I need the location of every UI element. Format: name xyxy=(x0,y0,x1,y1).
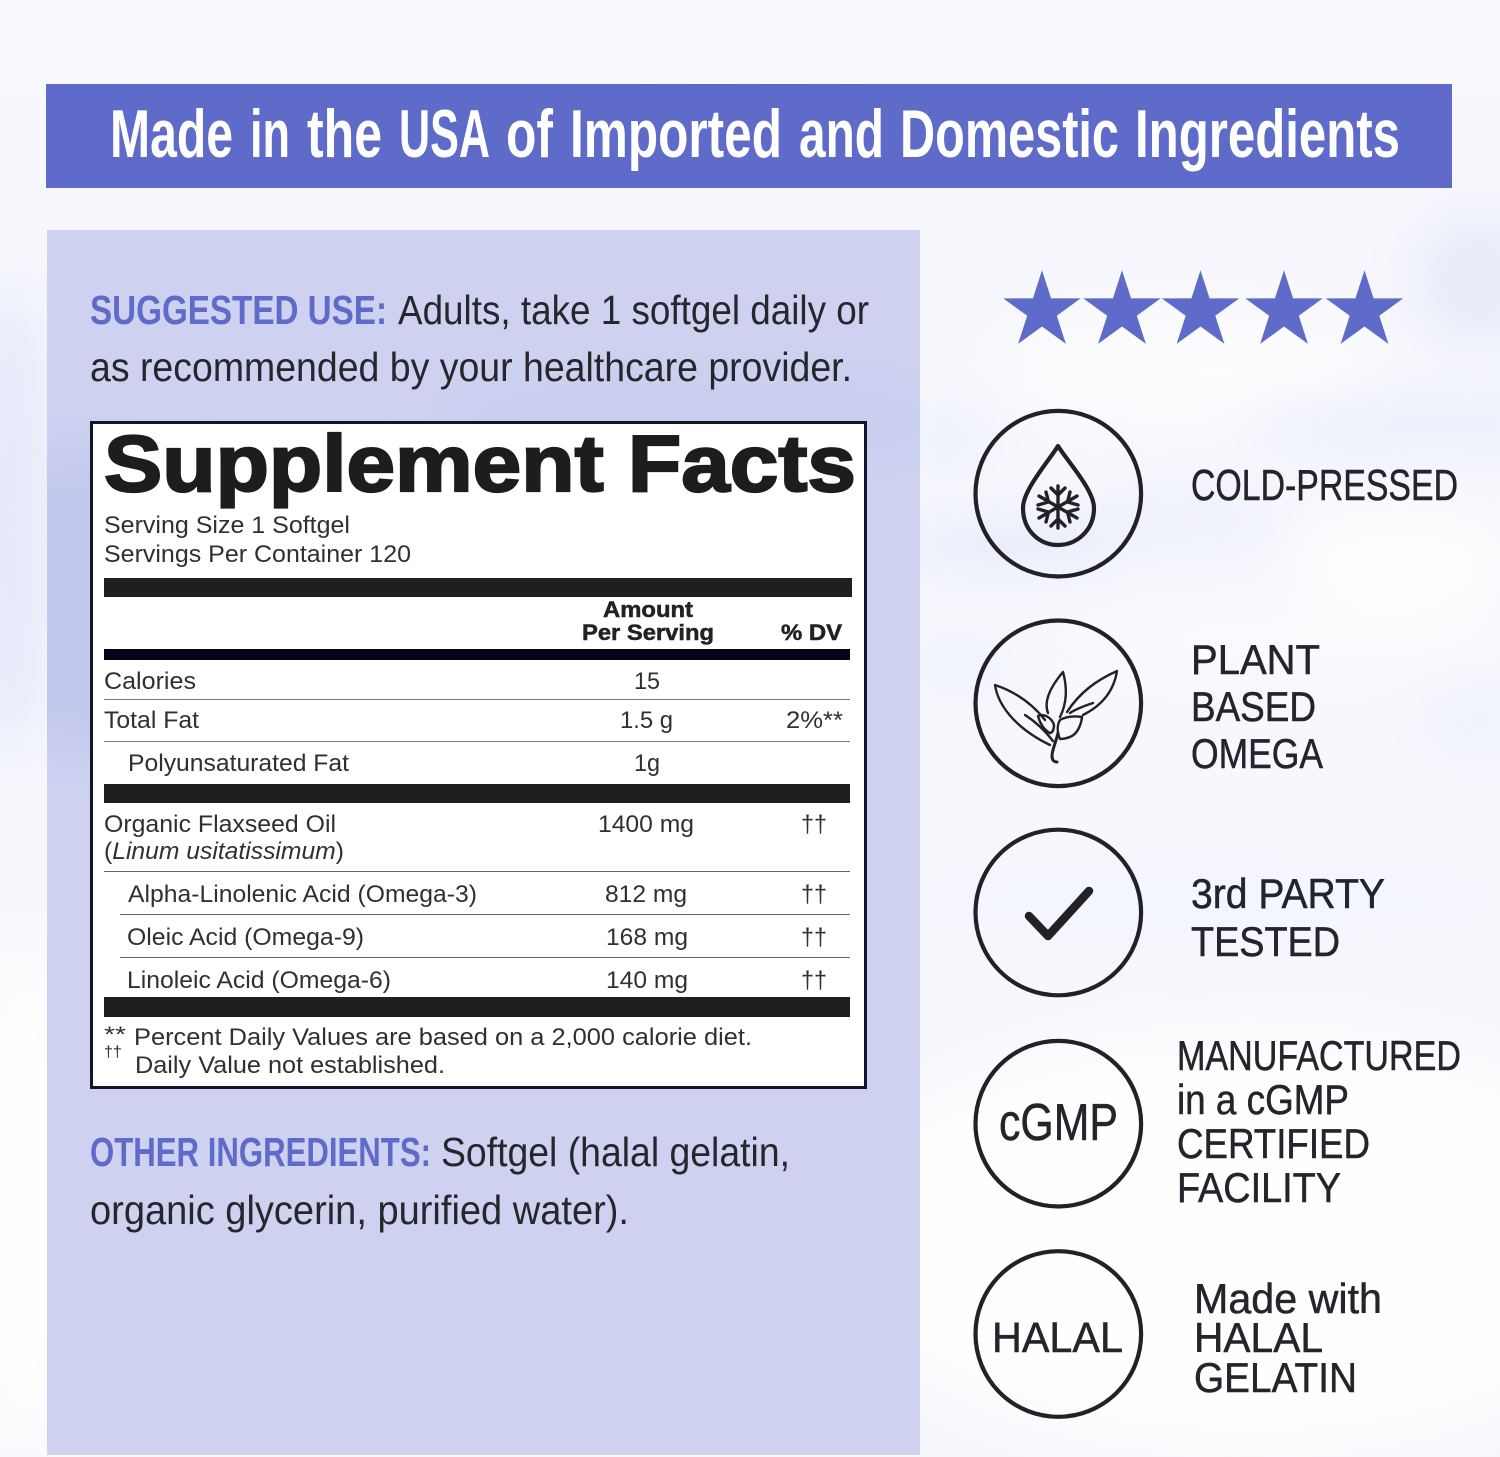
text block: suggested use: SUGGESTED USE: xyxy=(90,287,387,333)
label xyxy=(1194,1275,1382,1401)
title banner: USA xyxy=(399,96,490,172)
footnotes: Daily Value not established. xyxy=(135,1052,445,1079)
text block: other ingredients xyxy=(90,1129,790,1233)
footnotes: †† xyxy=(104,1044,122,1061)
badge: cold-pressed xyxy=(976,411,1458,576)
heading: supplement facts: Supplement Facts xyxy=(104,419,856,508)
table rows: (Linum usitatissimum) xyxy=(104,838,344,865)
label xyxy=(1191,636,1323,777)
panel: product information xyxy=(0,230,960,1455)
text block: other ingredients: organic glycerin, purified water). xyxy=(90,1187,629,1233)
icon: droplet with snowflake xyxy=(976,411,1141,576)
table rows xyxy=(104,668,850,994)
table rows: Alpha-Linolenic Acid (Omega-3) xyxy=(128,881,477,908)
footnotes xyxy=(104,1022,752,1079)
table rows: 812 mg xyxy=(605,881,687,908)
table rows: Polyunsaturated Fat xyxy=(128,750,349,777)
table rows: Oleic Acid (Omega-9) xyxy=(127,924,364,951)
table rows: Calories xyxy=(104,668,196,695)
table header xyxy=(582,597,842,645)
table rows: 140 mg xyxy=(606,967,688,994)
badge: plant based omega xyxy=(976,620,1323,786)
table header: % DV xyxy=(781,620,842,645)
table rows: †† xyxy=(801,924,827,951)
badge: cGMP facility xyxy=(976,1032,1461,1211)
table rows: 2%** xyxy=(786,707,843,734)
table rows: Total Fat xyxy=(104,707,199,734)
table header: Amount xyxy=(603,597,694,622)
title banner: Made xyxy=(110,96,233,172)
title banner: Imported xyxy=(570,96,782,172)
icon: HALAL circle xyxy=(976,1251,1141,1417)
table rows: Linoleic Acid (Omega-6) xyxy=(127,967,391,994)
table rows: 1400 mg xyxy=(598,811,694,838)
title banner: in xyxy=(250,96,290,172)
badge: third party tested xyxy=(976,830,1385,995)
serving information: Serving Size 1 Softgel xyxy=(104,512,350,539)
icon: HALAL circle: HALAL xyxy=(992,1314,1123,1362)
label: 3rd PARTY xyxy=(1191,870,1385,917)
label: GELATIN xyxy=(1194,1354,1357,1401)
table rows: †† xyxy=(801,967,827,994)
text block: suggested use: as recommended by your healthcare provider. xyxy=(90,344,852,390)
text block: other ingredients: Softgel (halal gelatin, xyxy=(441,1129,790,1175)
label: Made with xyxy=(1194,1275,1382,1322)
footnotes: Percent Daily Values are based on a 2,000 calorie diet. xyxy=(134,1024,752,1051)
icon: cGMP circle: cGMP xyxy=(999,1094,1118,1152)
label: TESTED xyxy=(1191,918,1340,965)
label xyxy=(1191,870,1385,965)
text block: suggested use xyxy=(90,287,869,390)
label: in a cGMP xyxy=(1177,1076,1349,1123)
badge: halal gelatin xyxy=(976,1251,1382,1417)
label: CERTIFIED xyxy=(1177,1120,1370,1167)
title banner: of xyxy=(506,96,553,172)
text block: other ingredients: OTHER INGREDIENTS: xyxy=(90,1129,431,1175)
table rows: 1g xyxy=(634,750,660,777)
supplement facts label xyxy=(92,419,866,1088)
five star rating xyxy=(1003,270,1403,344)
title banner: and xyxy=(799,96,884,172)
serving information: Servings Per Container 120 xyxy=(104,541,411,568)
label: OMEGA xyxy=(1191,730,1323,777)
table rows: Organic Flaxseed Oil xyxy=(104,811,336,838)
label: PLANT xyxy=(1191,636,1320,683)
table rows: †† xyxy=(801,811,827,838)
title banner: Ingredients xyxy=(1135,96,1400,172)
serving information xyxy=(104,512,411,568)
icon: check mark xyxy=(976,830,1141,995)
label: HALAL xyxy=(1194,1314,1323,1361)
label: FACILITY xyxy=(1177,1164,1341,1211)
icon: leaves xyxy=(976,620,1141,786)
table rows: †† xyxy=(801,881,827,908)
title banner: Domestic xyxy=(900,96,1119,172)
title banner xyxy=(46,84,1452,188)
table rows: 168 mg xyxy=(606,924,688,951)
table header: Per Serving xyxy=(582,620,714,645)
label xyxy=(1177,1032,1461,1211)
title banner: the xyxy=(307,96,382,172)
text block: suggested use: Adults, take 1 softgel daily or xyxy=(398,287,869,333)
icon: cGMP circle xyxy=(976,1041,1141,1206)
table rows: 15 xyxy=(634,668,660,695)
footnotes: ** xyxy=(104,1022,127,1047)
table rows: 1.5 g xyxy=(620,707,673,734)
label: BASED xyxy=(1191,683,1316,730)
